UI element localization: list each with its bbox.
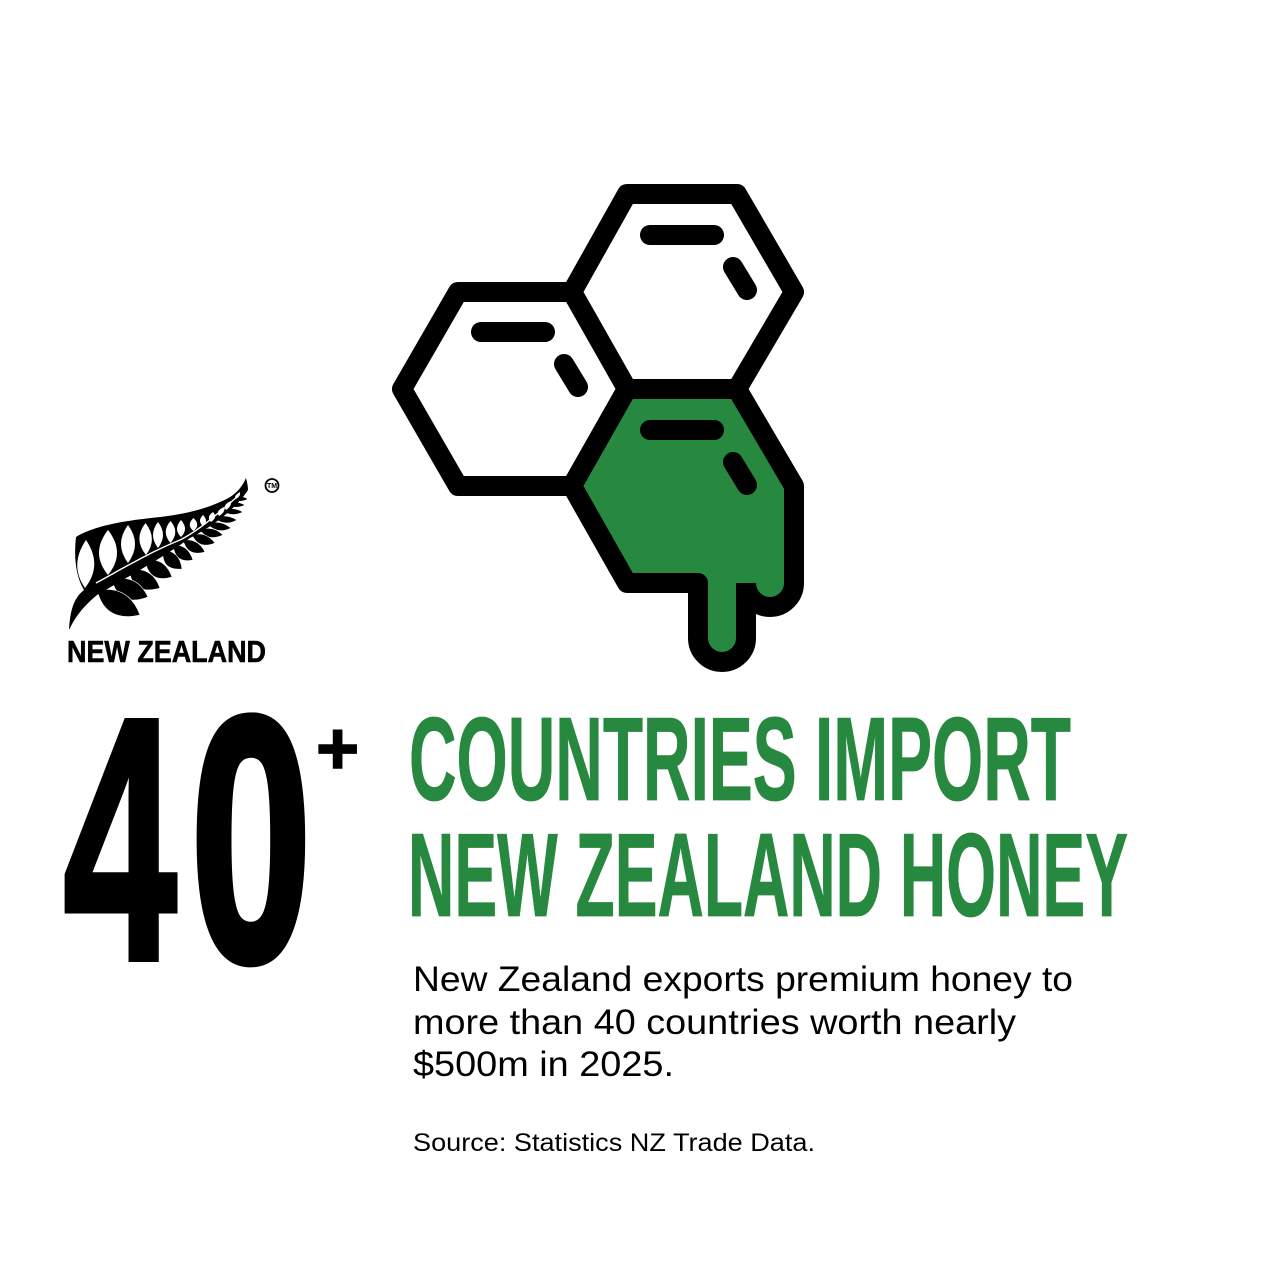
icon: left hexagon cell	[402, 292, 627, 486]
icon: trademark symbol	[266, 479, 278, 492]
big number: 40+: +	[316, 707, 359, 790]
big number: 40+: 4	[63, 647, 178, 1033]
text block: description: New Zealand exports premium honey to	[413, 960, 1073, 999]
icon: silver fern	[69, 478, 248, 630]
big number: 40+	[63, 644, 359, 1034]
text: NEW ZEALAND wordmark: NEW ZEALAND	[67, 634, 266, 669]
text: source: Source: Statistics NZ Trade Data.	[413, 1129, 815, 1157]
icon: top hexagon cell	[572, 194, 794, 389]
text block: description	[413, 960, 1073, 1084]
icon: highlights on the cells	[481, 235, 747, 485]
heading: countries import New Zealand honey	[408, 693, 1128, 942]
icon: honey filled cell with drips	[572, 389, 794, 662]
text block: description: $500m in 2025.	[413, 1045, 674, 1084]
logo: New Zealand fern mark	[67, 478, 278, 669]
icon: honeycomb with dripping honey	[402, 194, 794, 662]
text block: description: more than 40 countries worth nearly	[413, 1003, 1017, 1042]
icon: trademark symbol: TM	[267, 483, 277, 490]
big number: 40+: 0	[190, 644, 312, 1034]
